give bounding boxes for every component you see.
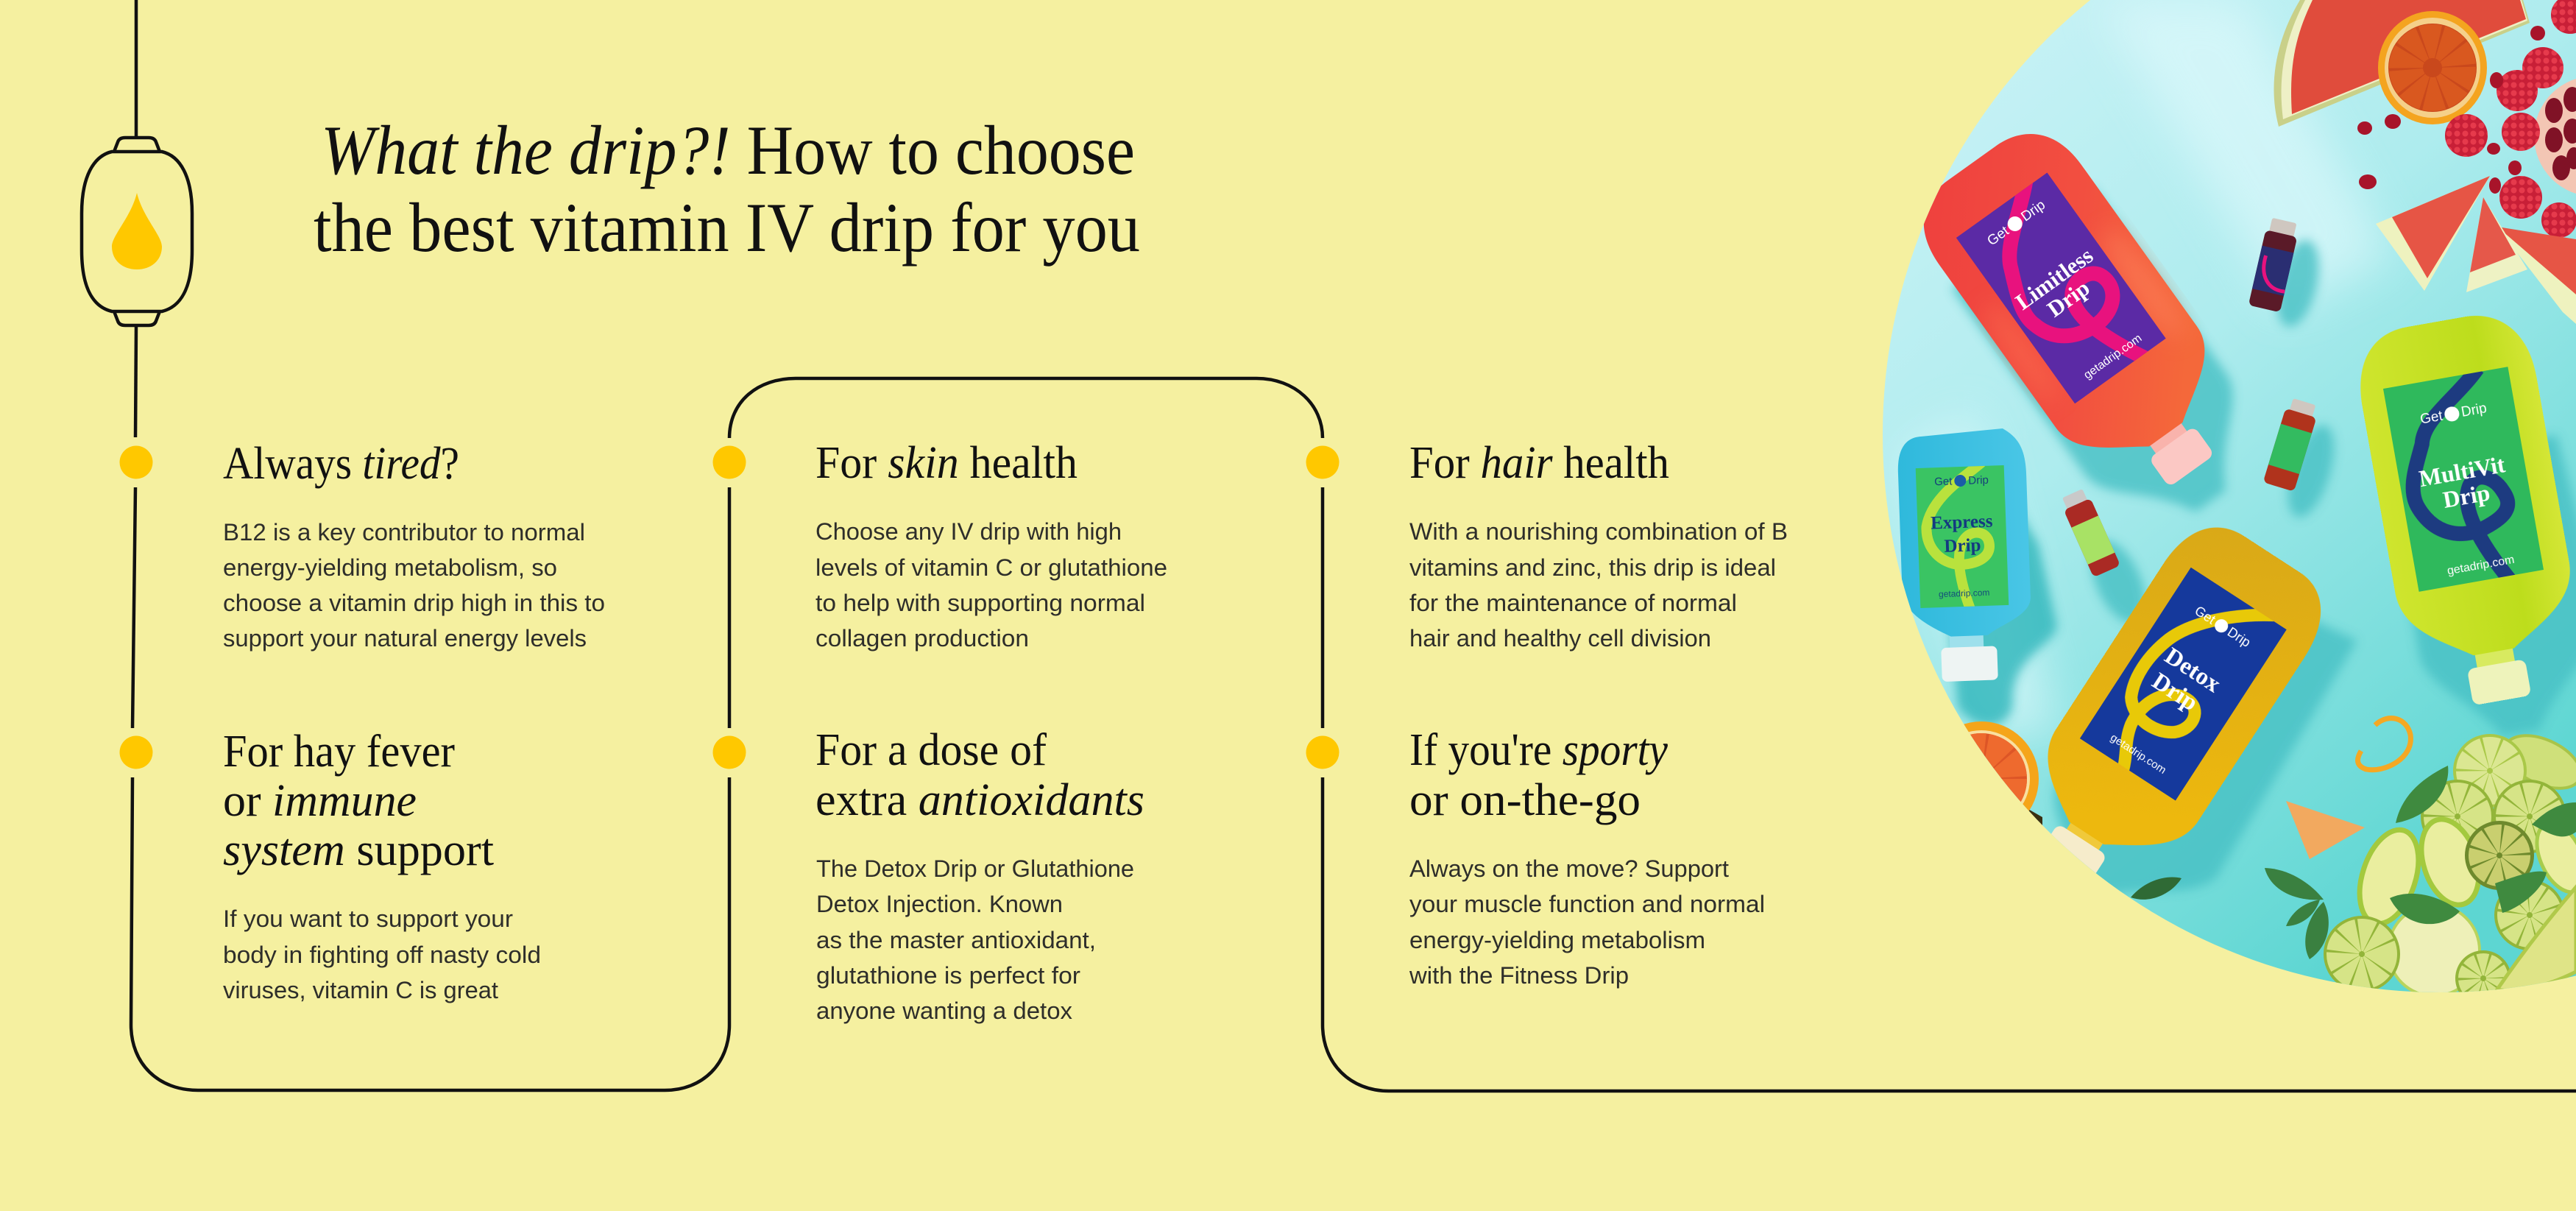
body text: Detox Injection. Known — [816, 891, 1063, 917]
marker dot — [712, 446, 746, 479]
bag: Limitless Drip — [1924, 134, 2212, 484]
bag cap — [1941, 646, 1998, 682]
label — [1916, 462, 2009, 612]
label: Limitless — [2011, 242, 2098, 315]
label: MultiVit — [2417, 451, 2508, 492]
heading — [223, 727, 494, 875]
label: Get — [2419, 409, 2444, 428]
panel: hair health — [1306, 438, 1788, 652]
body text: energy-yielding metabolism — [1409, 927, 1705, 953]
body text: The Detox Drip or Glutathione — [816, 855, 1134, 882]
body text — [815, 518, 1167, 652]
panel: sporty or on-the-go — [1306, 725, 1765, 989]
heading — [815, 725, 1144, 825]
body text — [1409, 518, 1788, 652]
marker dot — [1306, 736, 1340, 769]
panel: always tired — [119, 439, 605, 652]
body text: glutathione is perfect for — [816, 962, 1080, 989]
heading: For a dose of — [815, 725, 1047, 775]
leaf: lone mint — [2131, 877, 2182, 900]
vial: biotin booster — [2249, 218, 2296, 311]
body text: With a nourishing combination of B — [1409, 518, 1788, 545]
marker dot — [119, 736, 153, 769]
heading: or immune — [223, 776, 417, 826]
fruit: melon triangle — [2286, 801, 2365, 859]
label: Get — [1934, 475, 1953, 488]
heading: For hay fever — [223, 727, 455, 777]
label — [2382, 363, 2544, 596]
label: getadrip.com — [2446, 554, 2516, 578]
fruit: raspberries — [2445, 0, 2576, 238]
fruit: orange peel — [2358, 719, 2410, 770]
body text: If you want to support your — [223, 905, 513, 932]
body text: collagen production — [815, 625, 1029, 652]
label — [1953, 169, 2168, 407]
label: Drip — [2460, 400, 2488, 420]
body text — [816, 855, 1134, 1024]
fruit: limes and apples — [2324, 725, 2576, 1006]
body text: body in fighting off nasty cold — [223, 942, 541, 968]
label: Drip — [1968, 474, 1989, 487]
heading: If you're sporty — [1409, 725, 1668, 775]
bag cap — [2467, 659, 2531, 705]
label: getadrip.com — [2081, 332, 2144, 382]
fruit: pomegranate — [2534, 76, 2576, 197]
panel: antioxidants — [712, 725, 1144, 1024]
soft light streaks — [1899, 0, 2392, 736]
body text: as the master antioxidant, — [816, 927, 1096, 953]
body text: Choose any IV drip with high — [815, 518, 1122, 545]
body text: Always on the move? Support — [1409, 855, 1729, 882]
label: Drip — [2018, 197, 2048, 225]
fruit: cut orange — [1924, 721, 2042, 847]
shadows of bags — [1950, 187, 2576, 940]
heading — [1409, 725, 1668, 825]
leaf: mint sprig — [2265, 868, 2329, 959]
bag: MultiVit Drip — [2360, 315, 2570, 705]
body text: B12 is a key contributor to normal — [223, 519, 585, 546]
fruit: watermelon wedges — [2376, 176, 2576, 324]
marker dot — [119, 446, 153, 479]
marker dot — [712, 736, 746, 769]
bag cap — [2051, 826, 2105, 873]
label: getadrip.com — [2108, 731, 2168, 777]
panel: skin health — [712, 438, 1167, 652]
heading: extra antioxidants — [815, 775, 1144, 825]
body text: your muscle function and normal — [1409, 891, 1765, 917]
fruit: top watermelon slice — [2274, 0, 2530, 127]
body text: vitamins and zinc, this drip is ideal — [1409, 554, 1776, 581]
label — [2078, 563, 2290, 805]
body text: choose a vitamin drip high in this to — [223, 590, 605, 616]
body text: support your natural energy levels — [223, 625, 587, 652]
title: What the drip?! How to choose — [321, 111, 1135, 189]
body text: levels of vitamin C or glutathione — [815, 554, 1167, 581]
bag: Express Drip — [1897, 428, 2034, 683]
body text — [1409, 855, 1765, 989]
marker dot — [1306, 446, 1340, 479]
body text — [223, 519, 605, 652]
label: Drip — [1944, 535, 1981, 557]
label: Drip — [2147, 668, 2202, 716]
heading: For hair health — [1409, 438, 1669, 488]
leaf: mint among limes — [2390, 766, 2576, 924]
body text: to help with supporting normal — [815, 590, 1145, 616]
label: Drip — [2441, 479, 2492, 513]
title: the best vitamin IV drip for you — [314, 188, 1140, 266]
body text: hair and healthy cell division — [1409, 625, 1711, 652]
vial: vitamin B12 booster — [2264, 399, 2315, 490]
body text — [223, 905, 541, 1003]
vial: triple B12 booster — [2062, 490, 2119, 576]
fruit: blood orange slice — [2378, 11, 2487, 124]
label: Get — [1984, 223, 2012, 249]
label: Get — [2192, 603, 2218, 627]
body text: for the maintenance of normal — [1409, 590, 1737, 616]
label: Detox — [2160, 643, 2226, 698]
bag cap — [2151, 428, 2212, 484]
title — [314, 111, 1140, 266]
fruit: pomegranate seeds — [2357, 26, 2545, 194]
bag: Detox Drip — [2048, 527, 2321, 873]
body text: energy-yielding metabolism, so — [223, 554, 557, 581]
body text: anyone wanting a detox — [816, 998, 1072, 1024]
heading: or on-the-go — [1409, 775, 1641, 825]
icon: drip bag with drop — [82, 138, 192, 325]
panel: hay fever or immune system — [119, 727, 541, 1003]
heading: system support — [223, 825, 494, 875]
icon: yellow drop — [112, 193, 162, 269]
label: Drip — [2225, 624, 2253, 650]
body text: with the Fitness Drip — [1409, 962, 1629, 989]
label: Drip — [2042, 275, 2095, 322]
heading: Always tired? — [223, 439, 459, 489]
heading: For skin health — [815, 438, 1078, 488]
photo: IV drip bags and fruit in circle — [1877, 0, 2576, 1006]
label: getadrip.com — [1939, 587, 1990, 599]
label: Express — [1931, 512, 1993, 533]
body text: viruses, vitamin C is great — [223, 977, 498, 1003]
